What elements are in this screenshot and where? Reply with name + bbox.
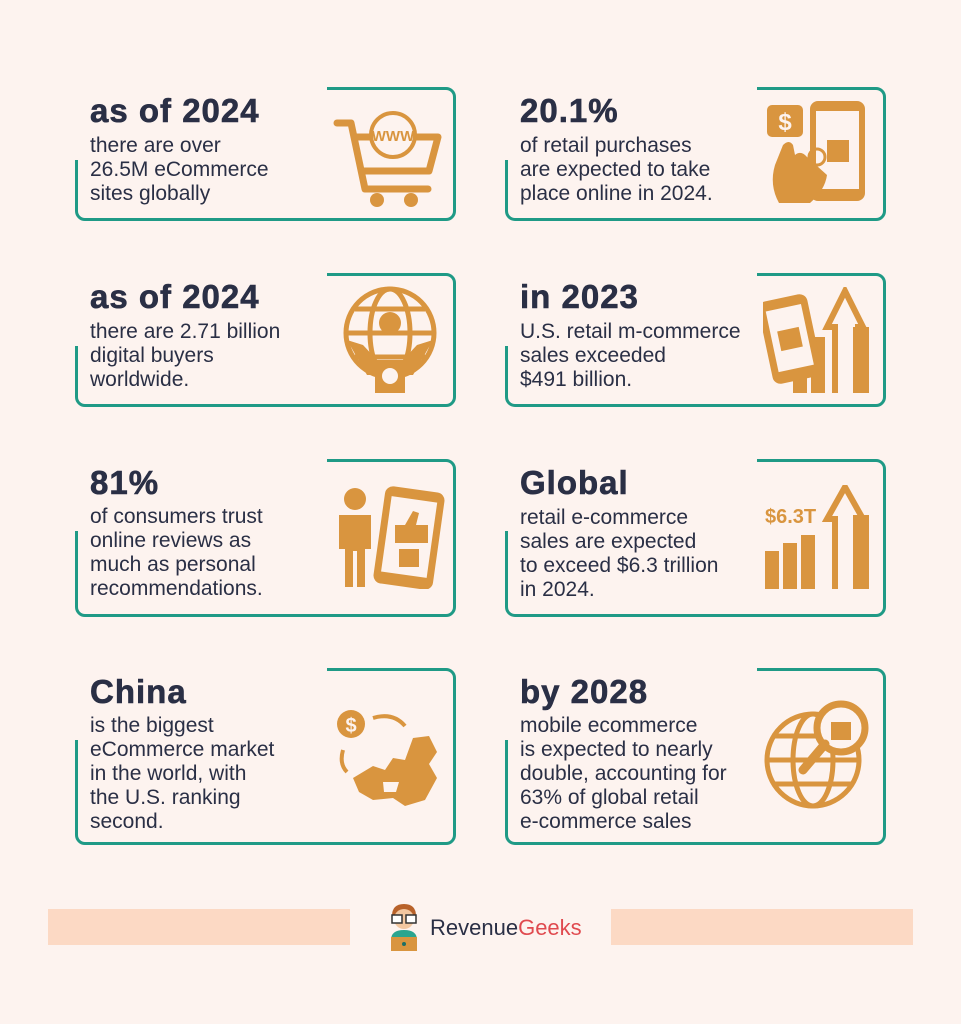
card: digital buyers [75,273,456,407]
card: global sales [505,459,886,617]
text: double, accounting for [520,762,727,785]
text: place online in 2024. [520,182,713,205]
text: second. [90,810,164,833]
text [90,714,274,833]
heading: Global [520,464,629,501]
icon: China map [337,710,437,806]
heading: by 2028 [520,673,648,710]
text: sales exceeded [520,344,666,367]
text [520,134,713,205]
text: worldwide. [90,368,189,391]
text: online reviews as [90,529,251,552]
text: mobile ecommerce [520,714,697,737]
text: digital buyers [90,344,214,367]
text [90,320,280,391]
heading: 20.1% [520,92,619,129]
icon: phone hand [767,101,865,203]
text: in 2024. [520,578,595,601]
brand name: RevenueGeeks [430,915,582,940]
card: mobile ecommerce 2028 [505,668,886,845]
text: to exceed $6.3 trillion [520,554,718,577]
icon: bar chart $6.3T [765,485,869,589]
text [90,134,269,205]
icon: cart www: WWW [372,128,415,145]
card: m-commerce [505,273,886,407]
text: sites globally [90,182,210,205]
text [520,506,718,601]
icon: person phone review [339,486,444,589]
text: is the biggest [90,714,214,737]
text: U.S. retail m-commerce [520,320,741,343]
heading: in 2023 [520,278,639,315]
icon: globe magnifier [764,700,868,808]
text: 26.5M eCommerce [90,158,269,181]
heading: as of 2024 [90,92,260,129]
heading: 81% [90,464,159,501]
text: of consumers trust [90,505,263,528]
text: $491 billion. [520,368,632,391]
heading: China [90,673,187,710]
icon: globe hands [344,286,436,393]
text: recommendations. [90,577,263,600]
icon: geek mascot [391,904,417,951]
text: are expected to take [520,158,710,181]
icon: bar chart $6.3T: $6.3T [765,506,816,528]
card: retail purchases [505,87,886,221]
text [90,505,263,600]
footer bar left [48,909,350,945]
icon: phone growth [763,287,869,393]
icon: China map: $ [345,715,357,737]
text: e-commerce sales [520,810,692,833]
text: in the world, with [90,762,246,785]
footer bar right [611,909,913,945]
icon: phone hand: $ [778,109,792,136]
logo [391,904,582,951]
text [520,714,727,833]
text: eCommerce market [90,738,274,761]
heading: as of 2024 [90,278,260,315]
text: the U.S. ranking [90,786,241,809]
text: retail e-commerce [520,506,688,529]
text: there are over [90,134,221,157]
text: of retail purchases [520,134,692,157]
card: China [75,668,456,845]
icon: cart www [334,111,442,207]
text: much as personal [90,553,256,576]
text: 63% of global retail [520,786,699,809]
text: sales are expected [520,530,696,553]
text: is expected to nearly [520,738,713,761]
text: there are 2.71 billion [90,320,280,343]
card: ecommerce sites [75,87,456,221]
card: reviews [75,459,456,617]
text [520,320,741,391]
